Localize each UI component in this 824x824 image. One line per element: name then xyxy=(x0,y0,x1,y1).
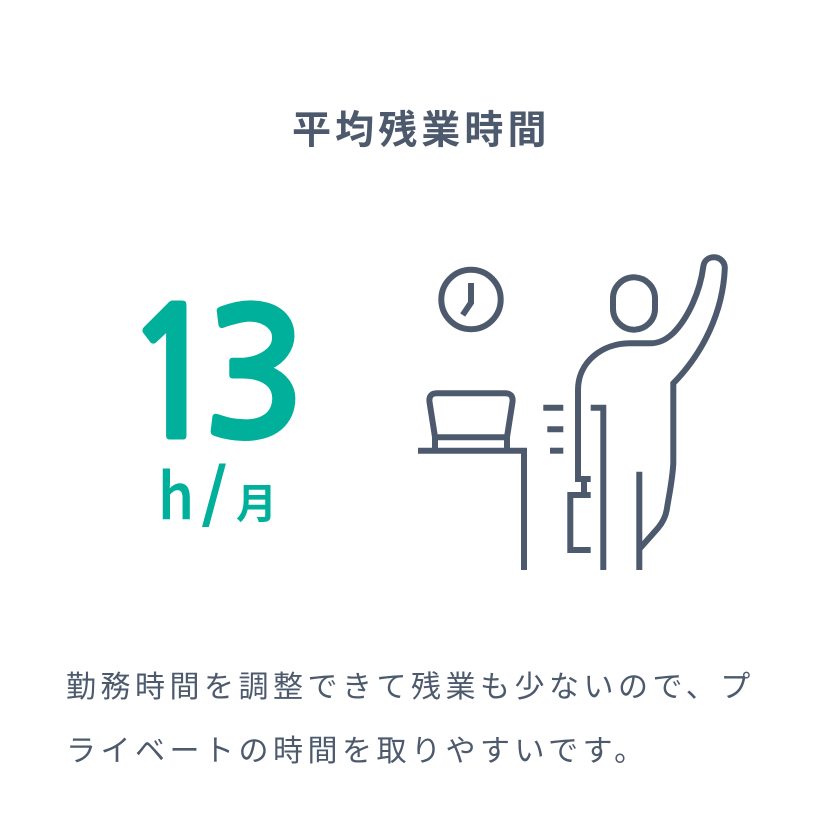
description text: ライベートの時間を取りやすいです。 xyxy=(66,726,649,770)
icon: laptop on desk xyxy=(418,393,524,570)
unit: hours per month: / xyxy=(202,449,226,545)
icon: person waving with briefcase xyxy=(570,257,725,570)
description text: 勤務時間を調整できて残業も少ないので、プ xyxy=(66,662,755,706)
title: 平均残業時間 xyxy=(292,100,551,156)
unit: hours per month: h xyxy=(158,447,194,538)
icon: motion dashes xyxy=(543,408,563,451)
icon: wall clock xyxy=(441,270,501,329)
description text xyxy=(66,662,755,770)
big number: 13: 1 xyxy=(123,287,222,465)
big number: 13: 3 xyxy=(202,290,308,465)
unit: hours per month xyxy=(158,447,277,545)
unit: hours per month: 月 xyxy=(236,470,277,530)
big number: 13 xyxy=(123,287,308,465)
